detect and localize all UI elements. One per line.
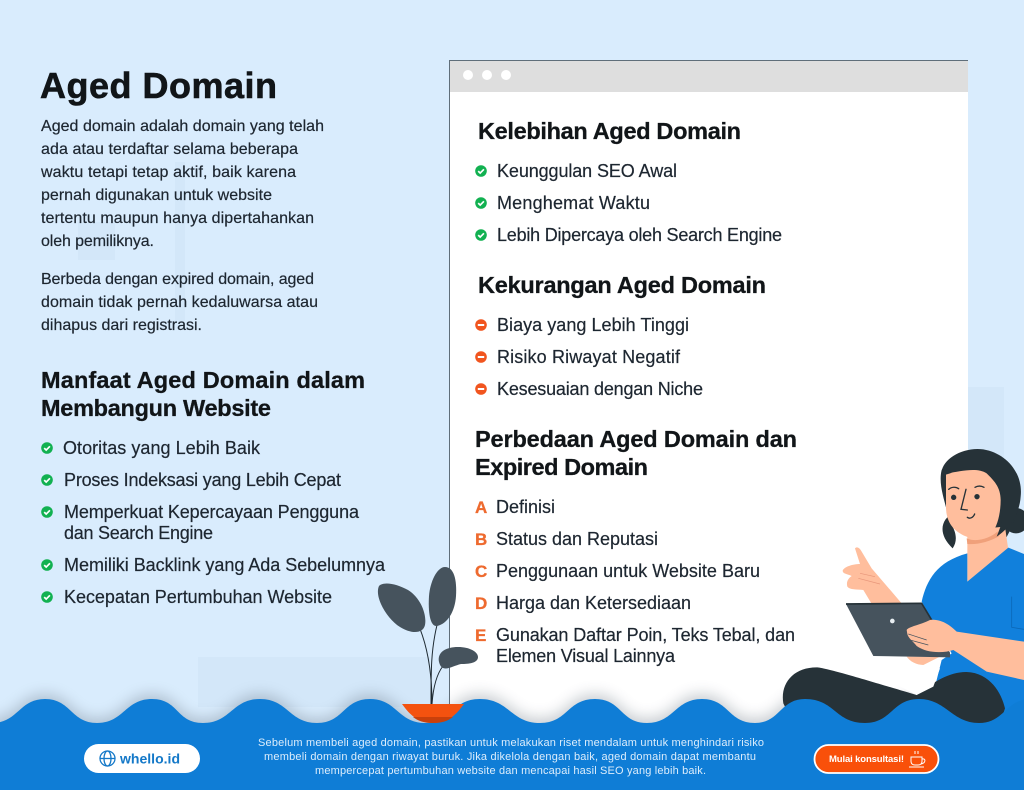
second paragraph [41,271,318,334]
footer wave [0,699,1024,790]
hair back [941,450,1020,548]
second paragraph: Berbeda dengan expired domain, aged [41,271,314,288]
list: kelebihan: Keunggulan SEO Awal [497,161,677,181]
hair front [942,449,1021,537]
list: kelebihan [475,161,782,245]
heading: manfaat: Membangun Website [41,395,271,421]
intro paragraph [40,118,324,250]
chin shadow [967,532,999,544]
list: perbedaan: Definisi [496,497,555,517]
heading: kekurangan: Kekurangan Aged Domain [478,272,766,298]
fingers [908,634,928,645]
list: manfaat: Kecepatan Pertumbuhan Website [64,587,332,607]
list: manfaat: Memiliki Backlink yang Ada Sebelumnya [64,555,386,575]
list: perbedaan: D [475,594,487,613]
list: manfaat [41,438,386,607]
list: manfaat: Otoritas yang Lebih Baik [63,438,261,458]
list: perbedaan: Harga dan Ketersediaan [496,593,691,613]
shirt [922,548,1024,730]
icon: coffee cup [909,751,925,767]
list: perbedaan: C [475,562,487,581]
list: kelebihan: Menghemat Waktu [497,193,650,213]
pointing arm [843,547,902,607]
background faint shapes [78,162,1004,707]
sleeve seam [1012,597,1024,629]
list: perbedaan: A [475,498,487,517]
list: kekurangan: Biaya yang Lebih Tinggi [497,315,689,335]
intro paragraph: Aged domain adalah domain yang telah [41,118,324,135]
list: manfaat: Proses Indeksasi yang Lebih Cepat [64,470,341,490]
intro paragraph: waktu tetapi tetap aktif, baik karena [40,164,296,181]
list: perbedaan [475,497,795,666]
intro paragraph: oleh pemiliknya. [41,233,154,250]
list: perbedaan: Status dan Reputasi [496,529,658,549]
holding arm [907,620,1024,680]
title: Aged Domain [40,65,277,106]
list: kelebihan: Lebih Dipercaya oleh Search Engine [497,225,782,245]
footer text: Sebelum membeli aged domain, pastikan untuk melakukan riset mendalam untuk menghindari risiko [258,737,764,749]
wave shadow [0,694,1024,785]
cta button [814,745,938,773]
panel: browser window [449,60,968,730]
list: perbedaan: Gunakan Daftar Poin, Teks Tebal, dan [496,625,795,645]
list: perbedaan: Penggunaan untuk Website Baru [496,561,760,581]
list: perbedaan: B [475,530,487,549]
footer text: membeli domain dengan riwayat buruk. Jika dikelola dengan baik, aged domain dapat membantu [264,751,756,763]
list: manfaat: Memperkuat Kepercayaan Pengguna [64,502,360,522]
list: kekurangan: Risiko Riwayat Negatif [497,347,681,367]
tablet arm hidden [907,657,940,665]
hair bun [1003,508,1024,533]
logo button [84,744,200,773]
window title bar [450,61,968,92]
heading: perbedaan: Perbedaan Aged Domain dan [475,426,797,452]
illustration: woman with tablet [783,449,1024,730]
logo button: whello.id [119,750,180,766]
footer text: mempercepat pertumbuhan website dan mencapai hasil SEO yang lebih baik. [315,765,706,777]
finger creases [858,573,880,584]
heading: perbedaan: Expired Domain [475,454,648,480]
icon: globe [100,751,115,766]
intro paragraph: tertentu maupun hanya dipertahankan [41,210,314,227]
heading: kelebihan: Kelebihan Aged Domain [478,118,741,144]
eyes and mouth [949,486,984,518]
list: perbedaan: E [475,626,486,645]
footer text [258,737,764,777]
tablet [846,603,950,657]
cta button: Mulai konsultasi! [829,754,904,765]
white leg gap [875,665,940,695]
legs [783,667,1005,723]
illustration: plant leaves [378,567,478,704]
second paragraph: domain tidak pernah kedaluwarsa atau [41,294,318,311]
list: perbedaan: Elemen Visual Lainnya [496,646,676,666]
second paragraph: dihapus dari registrasi. [41,317,202,334]
list: kekurangan [475,315,703,399]
heading: perbedaan [475,426,797,480]
list: kekurangan: Kesesuaian dengan Niche [497,379,703,399]
intro paragraph: pernah digunakan untuk website [41,187,272,204]
heading: manfaat [41,367,365,421]
neck [967,527,1008,583]
intro paragraph: ada atau terdaftar selama beberapa [41,141,298,158]
face [946,470,1001,538]
plant pot [402,704,464,723]
heading: manfaat: Manfaat Aged Domain dalam [41,367,365,393]
list: manfaat: dan Search Engine [64,523,213,543]
